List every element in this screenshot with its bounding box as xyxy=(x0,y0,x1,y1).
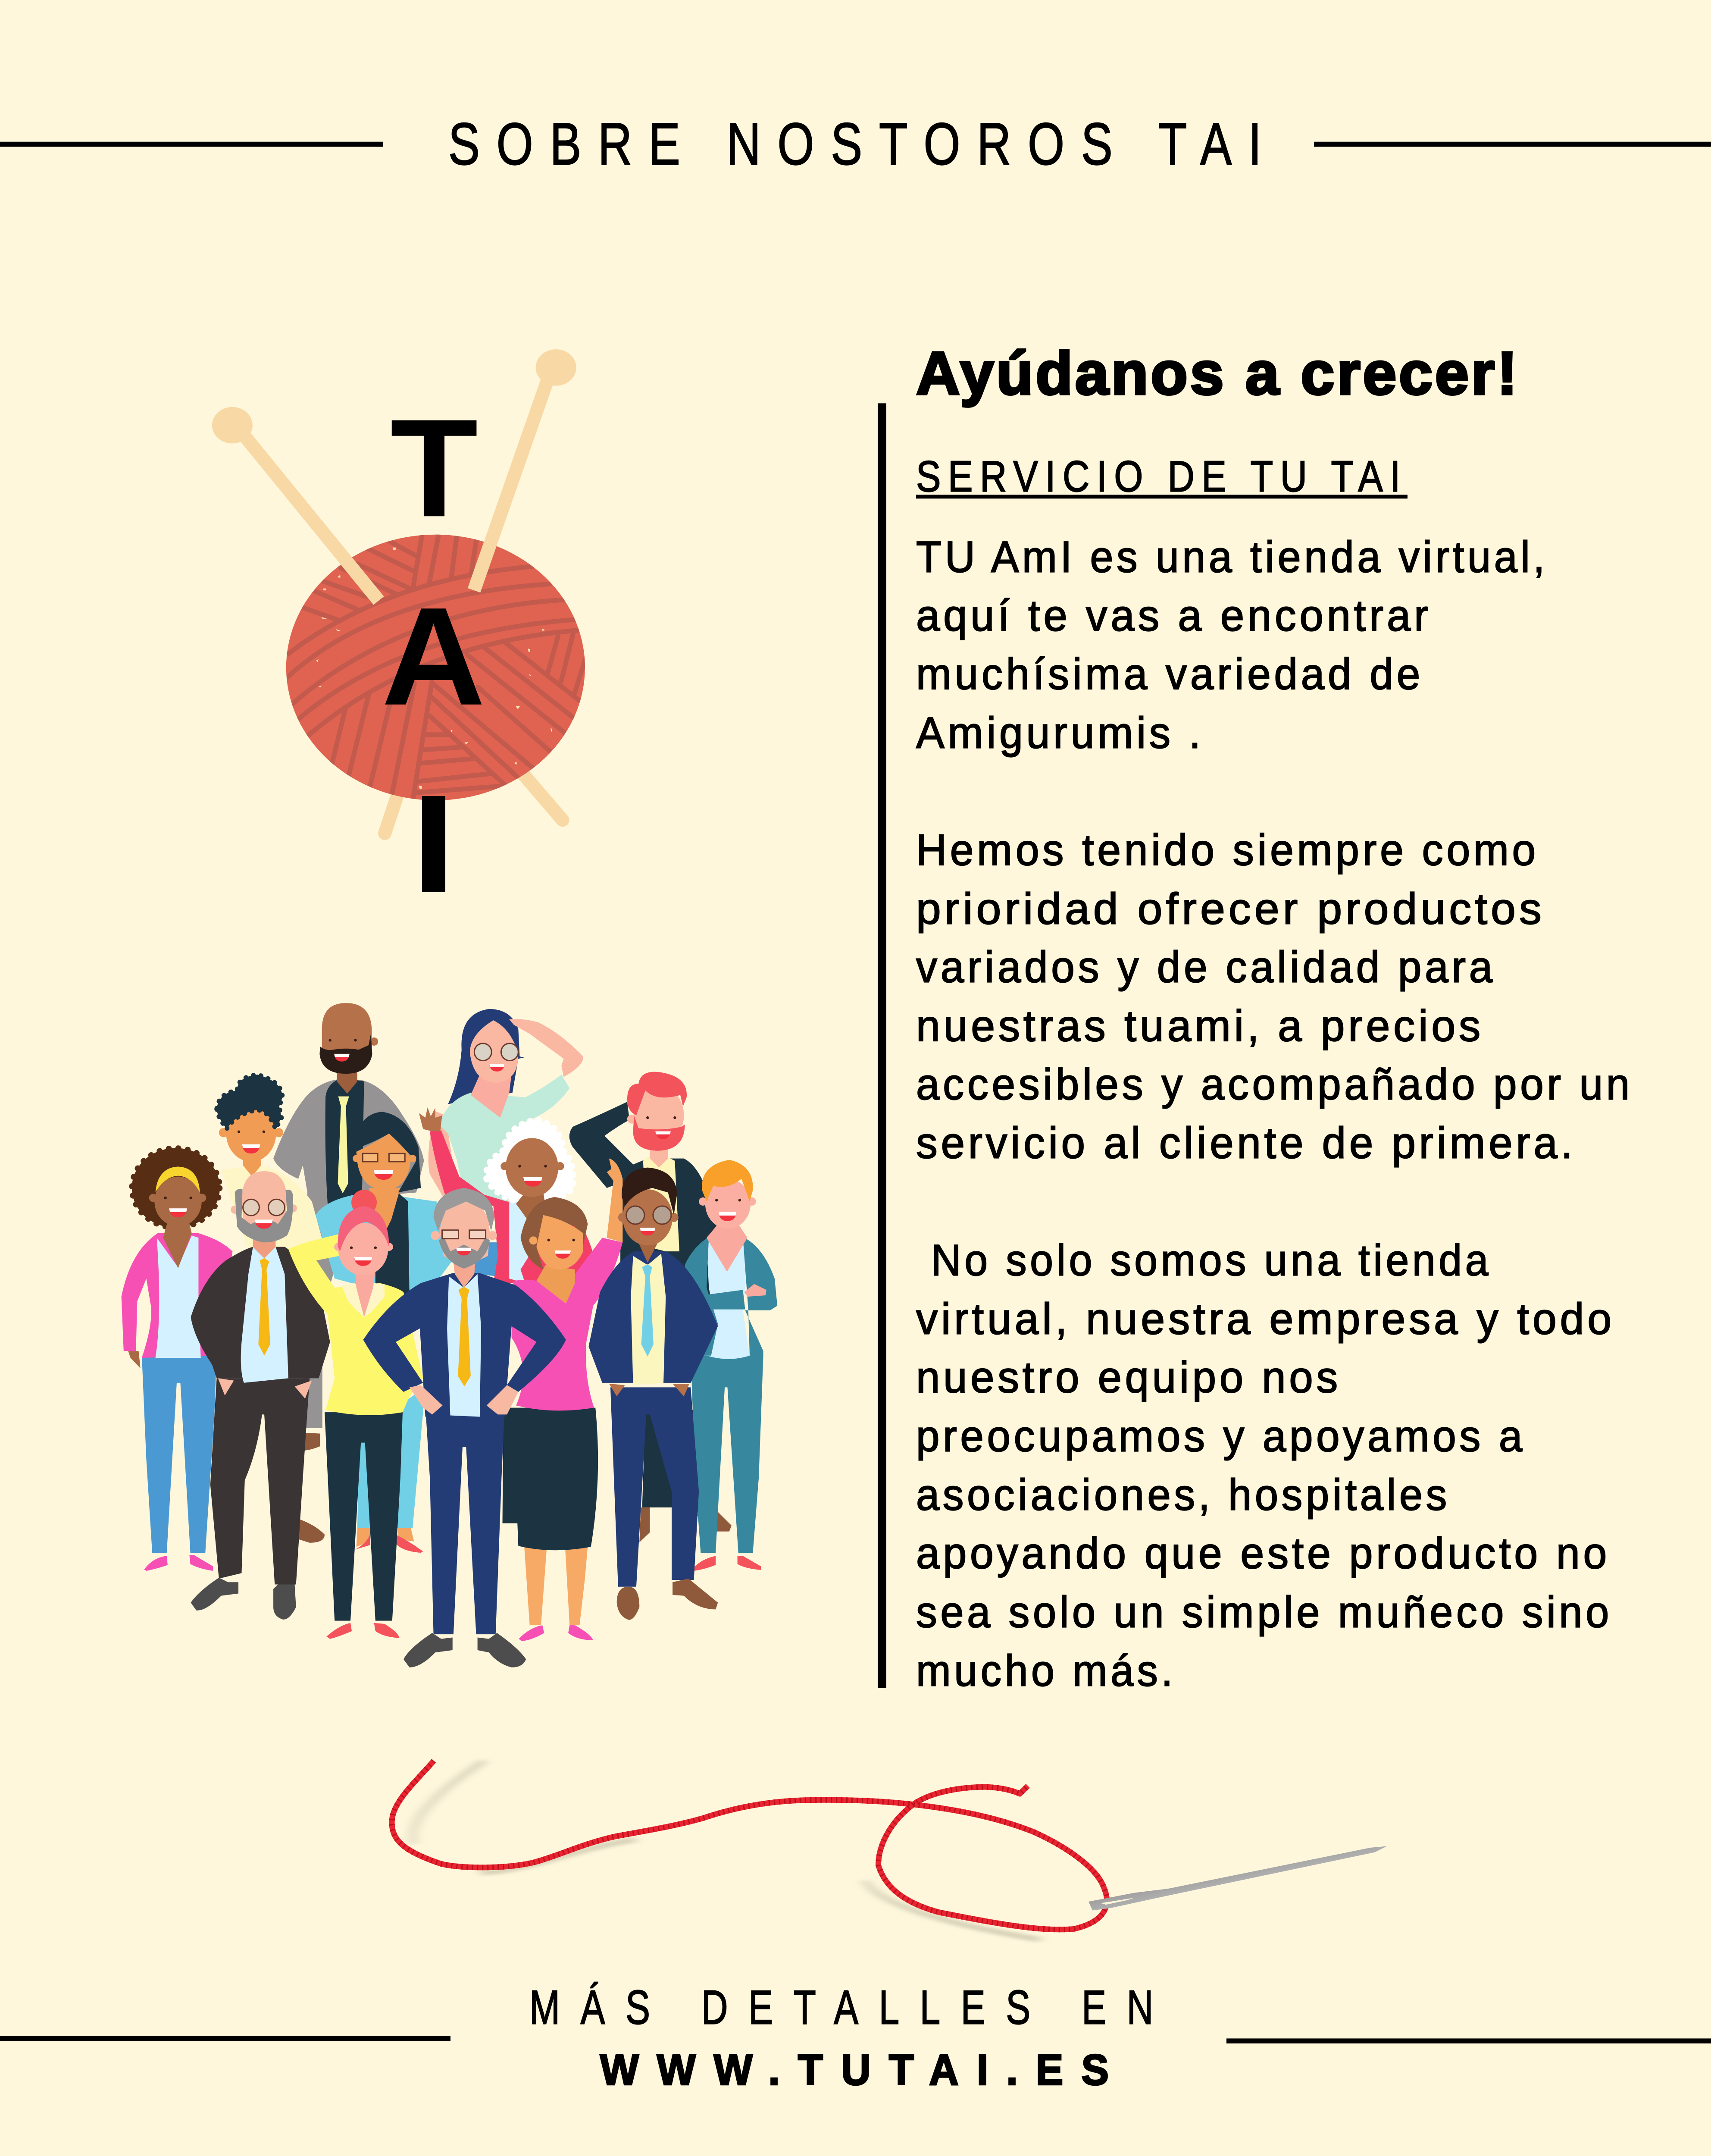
footer line: website: WWW.TUTAI.ES xyxy=(600,2045,1127,2094)
red thread xyxy=(392,1761,1107,1930)
vertical divider bar xyxy=(878,403,886,1688)
person: woman in pink top with raised arm xyxy=(503,1159,622,1641)
person: woman with afro in pink cardigan xyxy=(122,1148,232,1571)
subheading with underline: SERVICIO DE TU TAI xyxy=(916,451,1408,501)
person: curly haired person in cream shirt xyxy=(217,1075,325,1251)
heading: Ayúdanos a crecer! xyxy=(916,339,1520,407)
body text: prioridad ofrecer productos xyxy=(916,884,1545,934)
body text: apoyando que este producto no xyxy=(916,1529,1610,1578)
logo: yarn ball with needles and TAI letters xyxy=(212,349,585,921)
person: man in navy suit with glasses, right xyxy=(588,1168,718,1620)
person: man with red hair and beard xyxy=(569,1072,732,1542)
person: woman with black hair and light blue jacket xyxy=(316,1112,453,1553)
body text: Hemos tenido siempre como xyxy=(916,825,1539,875)
footer rule right xyxy=(1226,2038,1711,2043)
title: SOBRE NOSTOROS TAI xyxy=(448,111,1278,177)
footer line: more details: MÁS DETALLES EN xyxy=(529,1981,1174,2034)
body text: servicio al cliente de primera. xyxy=(916,1119,1576,1168)
body text: nuestras tuami, a precios xyxy=(916,1001,1484,1051)
logo letter A: A xyxy=(382,578,485,734)
person: older woman with white hair xyxy=(419,1107,597,1283)
body text: aquí te vas a encontrar xyxy=(916,591,1432,640)
knitting needles xyxy=(212,349,576,601)
logo letter I: I xyxy=(411,766,456,921)
body text: nuestro equipo nos xyxy=(916,1353,1341,1402)
person: central man in navy suit with hands on hips xyxy=(363,1188,566,1667)
yarn ball xyxy=(286,535,585,800)
body text: preocupamos y apoyamos a xyxy=(916,1411,1526,1461)
header rule right xyxy=(1314,142,1711,147)
logo letter T: T xyxy=(390,390,478,546)
body text: asociaciones, hospitales xyxy=(916,1470,1450,1520)
body text: muchísima variedad de xyxy=(916,649,1423,699)
person: bald man with glasses in black suit xyxy=(191,1171,330,1620)
illustration: group of diverse people xyxy=(122,1003,777,1667)
body text: No solo somos una tienda xyxy=(931,1235,1492,1285)
body text: Amigurumis . xyxy=(916,708,1204,758)
body text: variados y de calidad para xyxy=(916,943,1496,992)
person: bald man in grey jacket xyxy=(273,1003,424,1543)
needle tails under the ball xyxy=(385,771,563,834)
needle and red thread xyxy=(392,1761,1387,1940)
person: woman with blue hair and mint top xyxy=(429,1009,583,1206)
person: woman with orange hair in teal xyxy=(685,1160,777,1571)
body text: TU AmI es una tienda virtual, xyxy=(916,532,1548,582)
body text: virtual, nuestra empresa y todo xyxy=(916,1294,1615,1344)
footer rule left xyxy=(0,2036,450,2041)
body text xyxy=(916,532,1633,1695)
thread shadow xyxy=(413,1761,1040,1940)
person: woman with pink bun in yellow top xyxy=(288,1190,423,1639)
sewing needle xyxy=(1089,1846,1387,1911)
body text: mucho más. xyxy=(916,1646,1176,1695)
header rule left xyxy=(0,142,383,147)
